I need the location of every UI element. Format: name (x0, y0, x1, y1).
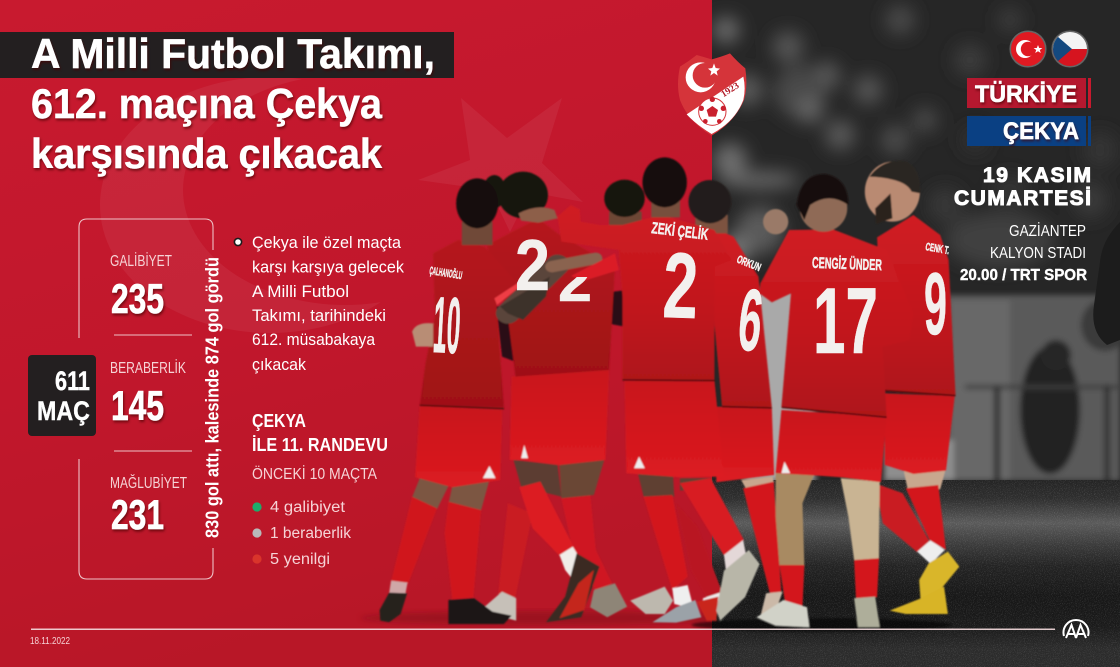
title text: A Milli Futbol Takımı, (31, 30, 435, 77)
date: 18.11.2022 (30, 635, 70, 647)
text block: intro: karşı karşıya gelecek (252, 258, 405, 276)
match venue and broadcast (960, 222, 1087, 284)
title bar (0, 32, 454, 78)
bullet (234, 238, 242, 246)
wins stat: GALİBİYET (110, 252, 172, 270)
panel: red background (94, 78, 712, 667)
match date: CUMARTESİ (954, 187, 1091, 210)
title (0, 30, 454, 177)
footer rule (31, 628, 1055, 630)
total matches box: MAÇ (37, 396, 90, 426)
text block: intro: Çekya ile özel maçta (252, 234, 402, 252)
player 22 (484, 172, 627, 622)
player 9 (865, 161, 959, 614)
team label: Çekya (967, 116, 1091, 146)
text block: intro: A Milli Futbol (252, 283, 349, 301)
icon: AA logo (1064, 620, 1088, 638)
jersey numbers and names: CENGİZ ÜNDER (812, 255, 882, 274)
subheading: previous matches: ÖNCEKİ 10 MAÇTA (252, 465, 378, 483)
wins stat (110, 252, 172, 322)
heading: Czech rendezvous (252, 411, 388, 455)
match venue and broadcast: GAZİANTEP (1009, 222, 1086, 240)
losses stat: MAĞLUBİYET (110, 474, 187, 492)
jersey numbers and names: ORKUN (735, 254, 763, 274)
player 17 (757, 174, 913, 627)
title text (31, 30, 435, 177)
jersey numbers and names: 2 (558, 247, 592, 314)
ground shadow right (691, 618, 952, 632)
jersey numbers and names: 6 (734, 269, 767, 370)
match date: 19 KASIM (983, 164, 1091, 187)
text block: intro (252, 234, 405, 374)
jersey numbers and names: ZEKİ ÇELİK (651, 219, 710, 244)
total matches box: 611 (55, 366, 90, 396)
draws stat: 145 (111, 382, 164, 429)
jersey numbers and names (430, 222, 949, 354)
icon: Turkish flag (1009, 30, 1047, 68)
team label: Türkiye: TÜRKİYE (975, 81, 1077, 108)
draws stat: BERABERLİK (110, 359, 187, 377)
sleeve over 22 (571, 253, 619, 281)
panel: stadium photo background (712, 0, 1120, 667)
dark gap between players (496, 290, 626, 363)
text block: intro: 612. müsabakaya (252, 331, 376, 349)
icon: Czech flag (1050, 30, 1090, 68)
icon: football federation crest (678, 53, 746, 136)
dark player arm at right edge (1093, 222, 1120, 345)
heading: Czech rendezvous: ÇEKYA (252, 411, 306, 431)
losses stat (110, 474, 187, 538)
losses stat: 231 (111, 491, 164, 538)
faint flag star (418, 98, 583, 232)
total matches box (28, 355, 96, 436)
draws stat (110, 359, 187, 429)
match date (954, 164, 1091, 210)
jersey numbers and names: 9 (924, 254, 947, 353)
player 10 (380, 178, 596, 624)
faint flag crescent (100, 78, 380, 333)
team label: Çekya: ÇEKYA (1003, 118, 1079, 145)
legend: previous results: 4 galibiyet (270, 499, 346, 516)
title text: karşısında çıkacak (31, 130, 383, 177)
goals vertical note: 830 gol attı, kalesinde 874 gol gördü (202, 257, 222, 538)
jersey numbers and names: 2 (515, 226, 550, 306)
text block: intro: Takımı, tarihindeki (252, 307, 386, 325)
photo: players group (380, 157, 959, 632)
match venue and broadcast: KALYON STADI (990, 245, 1086, 262)
wins stat: 235 (111, 275, 164, 322)
title text: 612. maçına Çekya (31, 80, 383, 127)
legend: previous results: 5 yenilgi (270, 551, 330, 568)
icon: football federation crest: 1923 (720, 81, 742, 100)
text block: intro: çıkacak (252, 356, 307, 374)
player 6 (688, 180, 783, 617)
background head (604, 180, 645, 227)
jersey numbers and names: CENK T. (924, 241, 950, 257)
heading: Czech rendezvous: İLE 11. RANDEVU (252, 435, 388, 455)
jersey numbers and names: 17 (813, 268, 878, 373)
legend: previous results (252, 499, 351, 568)
jersey numbers and names: ÇALHANOĞLU (429, 264, 463, 282)
legend: previous results: 1 beraberlik (270, 525, 351, 542)
panel: match record frame (79, 219, 222, 579)
hidden head (483, 175, 506, 208)
match venue and broadcast: 20.00 / TRT SPOR (960, 267, 1087, 284)
jersey numbers and names: 10 (431, 280, 463, 370)
player 2 (558, 157, 760, 623)
jersey numbers and names: 2 (661, 233, 700, 338)
